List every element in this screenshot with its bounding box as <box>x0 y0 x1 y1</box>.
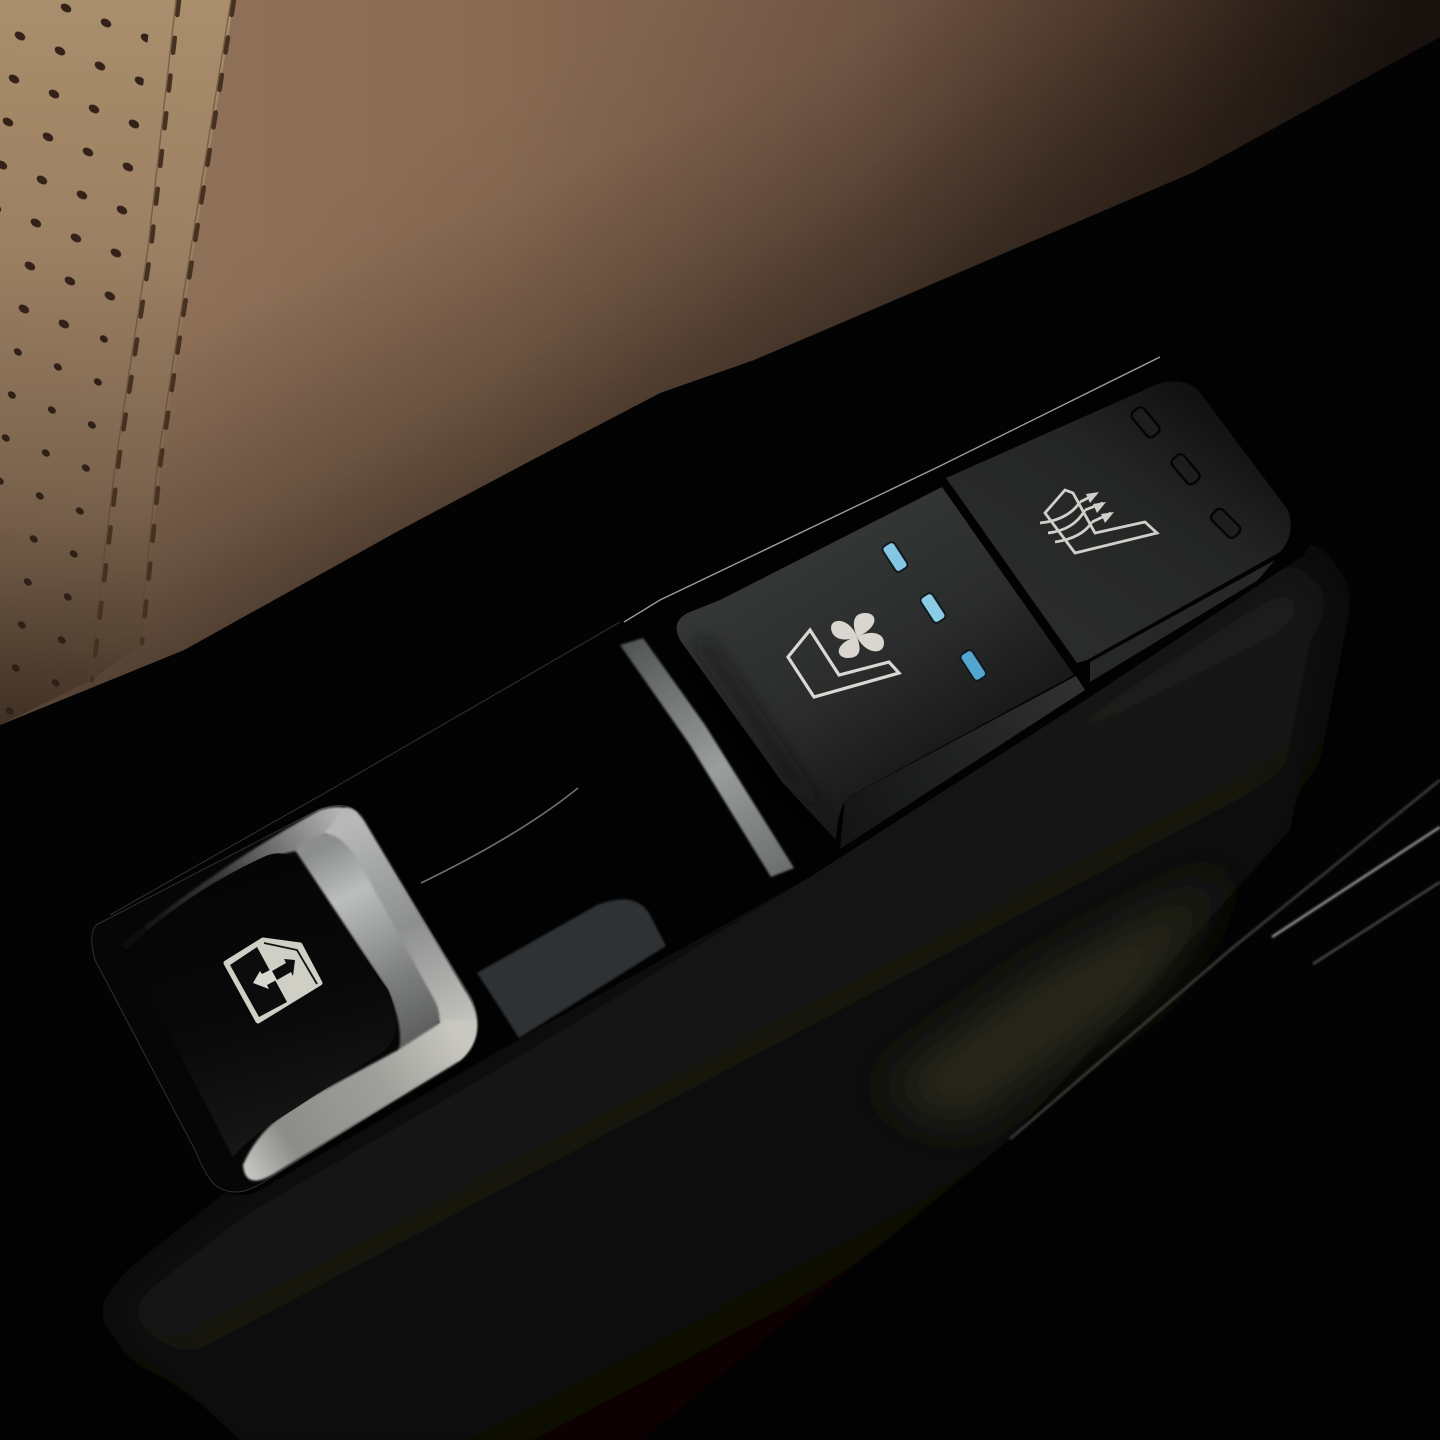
lit trim surface <box>100 551 1335 1440</box>
perforated insert and seam band <box>0 0 234 725</box>
left arrow <box>253 967 282 989</box>
heated seat icon <box>1040 490 1157 553</box>
second reflection streak <box>1313 882 1440 964</box>
metal door-handle switch <box>92 805 477 1192</box>
perforation dots lower <box>0 335 108 714</box>
perforation dots upper <box>0 0 160 330</box>
slot curved line <box>421 788 578 883</box>
lower chrome sweep <box>243 1020 476 1181</box>
silver divider bar <box>620 638 794 877</box>
black switch cap <box>126 853 396 1157</box>
door dark left half <box>230 947 287 1017</box>
button body <box>677 487 1074 840</box>
stitched seams <box>89 0 234 680</box>
leather upholstery <box>0 0 1440 730</box>
seat icon <box>788 630 899 697</box>
main leather panel <box>0 0 1440 725</box>
textured button lower band <box>840 676 1085 849</box>
door arrows icon <box>226 940 320 1021</box>
blue level indicators <box>881 541 988 682</box>
olive reflection <box>880 872 1230 1125</box>
recessed switch bay <box>95 353 1315 1195</box>
textured lower band <box>1090 560 1275 682</box>
bright reflection streak <box>1272 827 1440 937</box>
unlit level indicators <box>1130 405 1242 540</box>
fan icon <box>831 613 884 658</box>
bay highlight line <box>624 357 1160 622</box>
button body <box>946 382 1291 663</box>
door outline filled <box>226 940 320 1021</box>
ventilated seat button <box>677 487 1085 849</box>
trim body line <box>1010 780 1440 1139</box>
heated seat button <box>946 382 1291 682</box>
inner chrome lobe <box>295 834 439 1053</box>
left bay highlight <box>110 622 620 915</box>
right chrome column <box>325 808 477 1060</box>
glossy door trim <box>100 551 1440 1440</box>
button left shadow <box>690 640 832 820</box>
glossy surround <box>92 805 476 1192</box>
door inset slit <box>264 943 317 984</box>
upper chrome edge <box>120 807 358 950</box>
bay well <box>95 353 1315 1195</box>
slot grey insert <box>477 899 666 1038</box>
right arrow <box>272 959 295 980</box>
